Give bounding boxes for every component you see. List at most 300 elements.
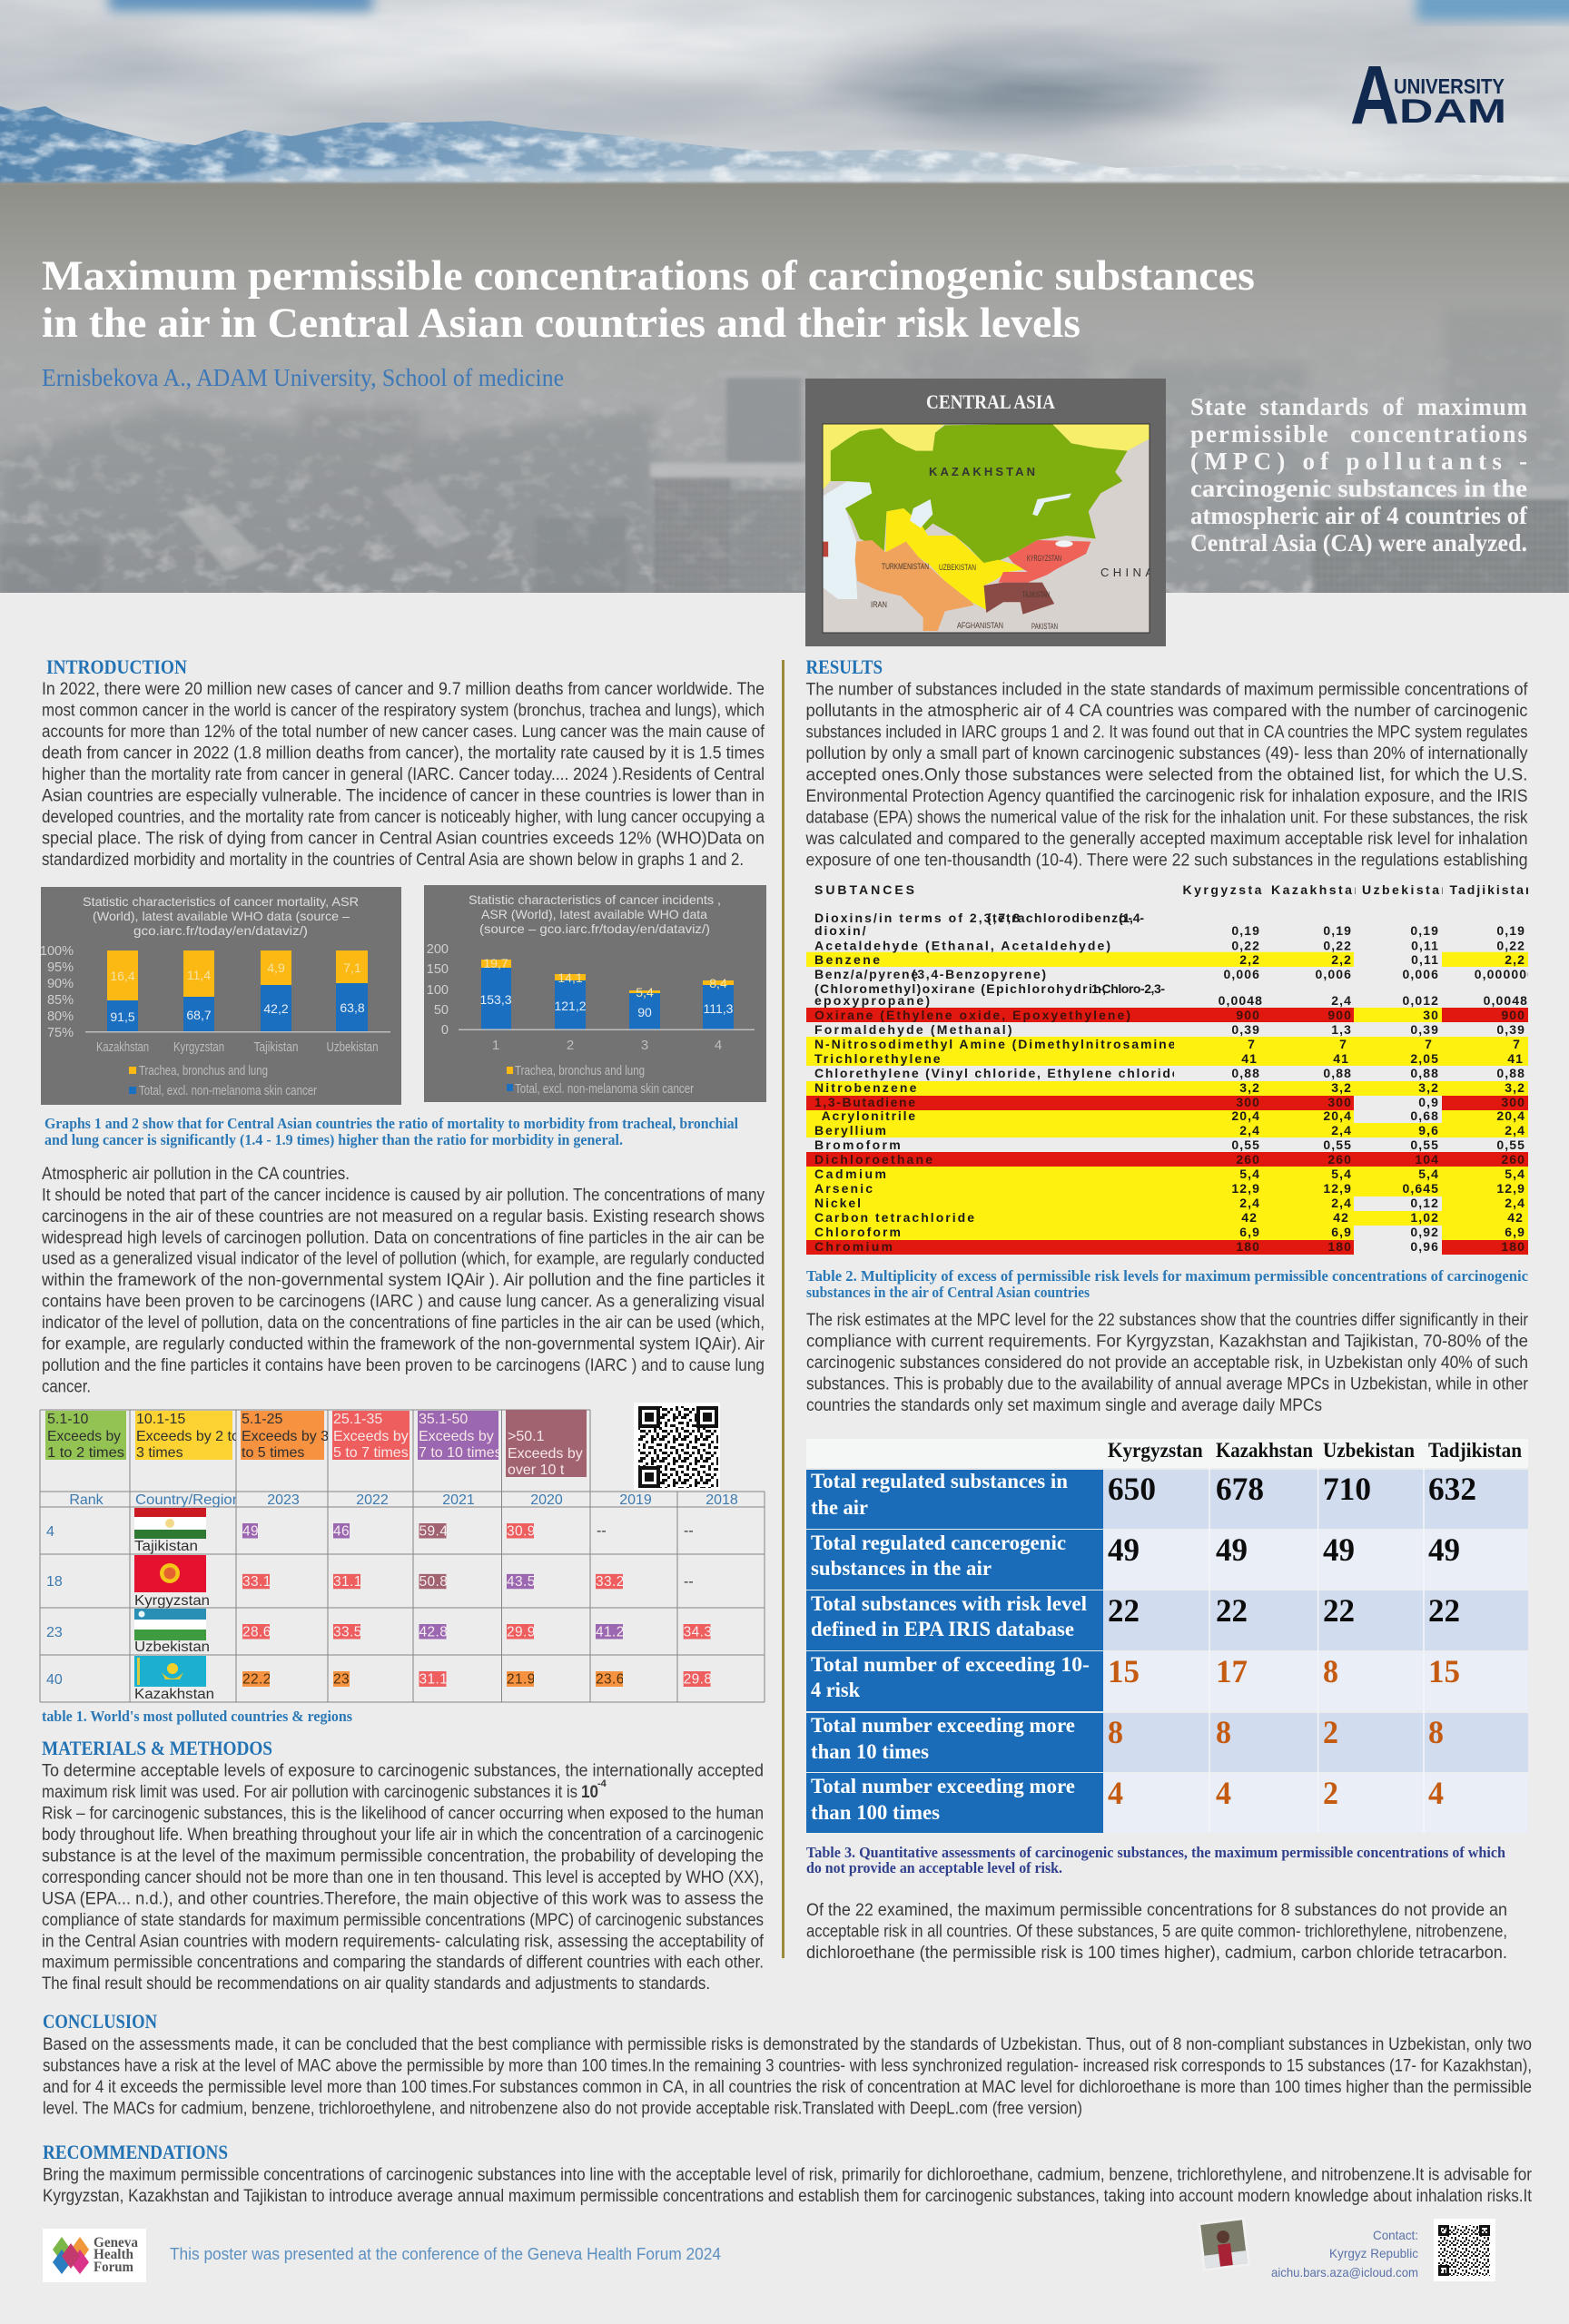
bar chart: cancer mortality: 4,9 <box>267 960 285 975</box>
bar chart: cancer mortality: (World), latest available WHO data (source – <box>93 909 350 923</box>
row: Kazakhstan: 23 <box>333 1672 350 1687</box>
bar chart: cancer mortality: 100% <box>40 944 74 959</box>
substance values: 7 <box>1513 1037 1521 1051</box>
map of Central Asia <box>823 424 1153 633</box>
row: Kyrgyzstan: Kyrgyzstan <box>134 1593 210 1609</box>
substance names: Chromium <box>814 1239 893 1254</box>
text block: materials and methods: maximum risk limit was used. For air pollution with carcinogenic substances it is <box>42 1783 577 1802</box>
column headers <box>814 882 1533 897</box>
substance names: (3,4-Benzopyrene) <box>912 967 1046 981</box>
row: Uzbekistan: 41.2 <box>596 1625 625 1640</box>
legend: concentration colour scale: 5 to 7 times <box>333 1445 409 1461</box>
text block: atmospheric air pollution: carcinogens in the air of these countries are not measured on a regular basis. Existing research shows <box>42 1207 765 1226</box>
row: Kazakhstan: 31.1 <box>419 1672 448 1687</box>
heading: introduction: INTRODUCTION <box>46 655 187 678</box>
portrait photo <box>1198 2217 1250 2271</box>
row: regulated cancerogenic substances: 49 <box>1108 1531 1140 1568</box>
header row: Kyrgyzstan <box>1108 1439 1203 1462</box>
text block: atmospheric air pollution: within the framework of the non-governmental system IQAir ). Air pollution and the fine particles it <box>41 1271 765 1290</box>
substance values: 6,9 <box>1331 1225 1352 1239</box>
heading: conclusion: CONCLUSION <box>43 2010 157 2033</box>
bar chart: cancer incidents: Total, excl. non-melanoma skin cancer <box>515 1081 694 1097</box>
row: Tajikistan: -- <box>684 1523 694 1539</box>
substance values: 30 <box>1423 1008 1439 1022</box>
substance names: Arsenic <box>814 1181 873 1196</box>
column headers: SUBTANCES <box>814 882 914 897</box>
map labels: TURKMENISTAN <box>882 562 929 571</box>
table header: 2021 <box>442 1492 475 1508</box>
caption: table 2 <box>806 1267 1528 1301</box>
panel: Central Asia map: CENTRAL ASIA <box>926 390 1055 413</box>
row: Uzbekistan: 28.6 <box>242 1625 271 1640</box>
text block: results: pollutants in the atmospheric air of 4 CA countries was compared with the number of carcinogenic <box>806 702 1527 721</box>
text block: examined substances: Of the 22 examined, the maximum permissible concentrations for 8 substances do not provide an <box>806 1901 1507 1920</box>
substance values: 0,96 <box>1410 1239 1439 1254</box>
substance values: 2,4 <box>1505 1196 1525 1210</box>
substance values: 300 <box>1236 1095 1260 1109</box>
bar chart: cancer mortality: Kyrgyzstan <box>173 1039 224 1055</box>
bar chart: cancer mortality: 95% <box>47 960 74 975</box>
caption: table 3: do not provide an acceptable level of risk. <box>806 1859 1062 1876</box>
substance values: 7 <box>1339 1037 1347 1051</box>
caption: table 3 <box>806 1844 1506 1876</box>
substance values: 2,2 <box>1505 952 1525 967</box>
text block: state standards summary: permissible concentrations <box>1190 420 1527 448</box>
row: Tajikistan: 59.4 <box>419 1523 448 1540</box>
row: total regulated substances: 678 <box>1216 1471 1264 1507</box>
text block: atmospheric air pollution: used as a generalized visual indicator of the level of pollution (which, for example, are regularly conducted <box>42 1250 765 1269</box>
row: exceeding 10-4 risk <box>811 1653 1460 1701</box>
row: regulated cancerogenic substances: substances in the air <box>811 1557 992 1580</box>
text block: atmospheric air pollution: pollution and the fine particles it contains have been proven to be carcinogens (IARC ) and to cause lung <box>42 1356 765 1375</box>
column headers: Kyrgyzstan <box>1182 882 1271 897</box>
row: Kyrgyzstan: 43.5 <box>507 1574 536 1590</box>
text block: materials and methods: substance is at the level of the maximum permissible concentration, the probability of developing the <box>42 1847 764 1866</box>
bar chart: cancer incidents: 19,7 <box>483 956 508 970</box>
row: Kyrgyzstan: -- <box>684 1574 694 1590</box>
substance values: 0,88 <box>1496 1066 1525 1080</box>
substance values: 3,2 <box>1505 1080 1525 1095</box>
text block: results: pollution by only a small part of known carcinogenic substances (49)- less than 20% of internationally <box>806 744 1528 763</box>
substance values: 0,88 <box>1410 1066 1439 1080</box>
substance values: 2,4 <box>1239 1196 1260 1210</box>
header photo: mountains above smog over city <box>0 0 1569 618</box>
text block: materials and methods: corresponding cancer should not be more than one in ten thousand. This level is accepted by WHO (XX), <box>42 1868 764 1887</box>
substance values: 0,006 <box>1315 967 1352 981</box>
map labels <box>871 465 1153 631</box>
legend: concentration colour scale: 5.1-10 <box>47 1412 88 1427</box>
text block: atmospheric air pollution <box>41 1165 765 1396</box>
row: exceeding 10-4 risk: Total number of exceeding 10- <box>811 1653 1090 1676</box>
column headers: Uzbekistan <box>1362 882 1449 897</box>
substance values: 20,4 <box>1496 1108 1525 1123</box>
text block: materials and methods: The final result should be recommendations on air quality standards and adjustments to standards. <box>42 1974 710 1994</box>
bar chart: cancer incidents: 121,2 <box>554 999 587 1013</box>
legend: concentration colour scale: 25.1-35 <box>333 1412 382 1427</box>
text block: introduction: standardized morbidity and mortality in the countries of Central Asia are shown below in graphs 1 and 2. <box>42 851 744 870</box>
row: total regulated substances: 710 <box>1323 1471 1371 1507</box>
substance values: 0,22 <box>1496 939 1525 953</box>
substance values: 260 <box>1327 1152 1352 1167</box>
text block: conclusion: level. The MACs for cadmium, benzene, trichloroethylene, and nitrobenzene also do not provide acceptable risk.Translated with DeepL.com (free version) <box>43 2099 1082 2119</box>
substance values: 300 <box>1501 1095 1525 1109</box>
row: exceeding more than 100 times: 2 <box>1323 1775 1338 1811</box>
text block: atmospheric air pollution: for example, are regularly conducted within the framework of the non-governmental system IQAir). Air <box>42 1334 765 1354</box>
footer note: This poster was presented at the conference of the Geneva Health Forum 2024 <box>170 2245 721 2263</box>
substance values: 5,4 <box>1418 1167 1439 1181</box>
substance values: 3,2 <box>1418 1080 1439 1095</box>
row: exceeding more than 10 times: Total number exceeding more <box>811 1714 1075 1737</box>
bar chart: cancer mortality: 42,2 <box>263 1001 289 1016</box>
text block: risk estimates: countries the standards only set maximum single and average daily MPCs <box>806 1396 1322 1415</box>
bar chart: cancer mortality: gco.iarc.fr/today/en/dataviz/) <box>133 923 308 938</box>
substance values: 180 <box>1501 1239 1525 1254</box>
substance names: Carbon tetrachloride <box>814 1210 974 1225</box>
bar chart: cancer incidents: 200 <box>427 942 449 957</box>
substance values: 0,39 <box>1410 1022 1439 1037</box>
substance names: dioxin/ <box>814 923 866 938</box>
substance names: Nitrobenzene <box>814 1080 917 1095</box>
row: substances with defined risk: 22 <box>1216 1592 1248 1629</box>
bar chart: cancer incidents: 90 <box>637 1005 652 1019</box>
substance values: 2,05 <box>1410 1051 1439 1066</box>
text block: introduction: death from cancer in 2022 (1.8 million deaths from cancer), the mortality rate caused by it is 1.5 times <box>42 744 765 763</box>
legend: concentration colour scale: 3 times <box>136 1445 183 1461</box>
substance names: epoxypropane) <box>814 993 930 1008</box>
bar chart: cancer incidents: 150 <box>427 962 449 977</box>
substance values: 9,6 <box>1418 1123 1439 1137</box>
substance names: Nickel <box>814 1196 861 1210</box>
bar chart: cancer incidents: 8,4 <box>709 976 727 990</box>
substance values: 260 <box>1236 1152 1260 1167</box>
text block: introduction: higher than the mortality rate from cancer in general (IARC. Cancer today.... 2024 ).Residents of Central <box>42 765 765 784</box>
legend: concentration colour scale: 7 to 10 times <box>419 1445 502 1461</box>
text block: results: exposure of one ten-thousandth (10-4). There were 22 such substances in the regulations establishing <box>806 852 1527 871</box>
row: Uzbekistan: 23 <box>46 1625 63 1640</box>
bar chart: cancer incidents: 111,3 <box>704 1001 734 1016</box>
row: Kyrgyzstan: 31.1 <box>333 1574 362 1590</box>
row: total regulated substances: the air <box>811 1496 868 1519</box>
logo: Geneva Health Forum: Geneva <box>94 2235 138 2250</box>
column headers: Tadjikistan <box>1449 882 1533 897</box>
row: exceeding 10-4 risk: 15 <box>1428 1653 1460 1689</box>
contact details: Contact: <box>1373 2228 1418 2242</box>
table header <box>69 1492 738 1508</box>
substance values: 0,55 <box>1231 1137 1260 1152</box>
row: Kyrgyzstan: 33.2 <box>596 1574 625 1590</box>
row: Kyrgyzstan <box>46 1555 694 1609</box>
text block: materials and methods: 10 <box>581 1783 598 1802</box>
substance values: 0,19 <box>1496 923 1525 938</box>
legend: concentration colour scale: Exceeds by 3 <box>242 1429 329 1444</box>
row backgrounds <box>806 1439 1528 1833</box>
text block: introduction: most common cancer in the world is cancer of the respiratory system (bronchus, trachea and lungs), which <box>42 701 765 721</box>
substance names: Beryllium <box>814 1123 886 1137</box>
row: exceeding 10-4 risk: 17 <box>1216 1653 1248 1689</box>
text block: results <box>805 681 1528 871</box>
substance values: 0,11 <box>1411 952 1439 967</box>
substance values <box>1219 923 1535 1254</box>
row: regulated cancerogenic substances: Total regulated cancerogenic <box>811 1531 1066 1554</box>
row: exceeding more than 10 times: 8 <box>1428 1714 1444 1750</box>
substance values: 900 <box>1327 1008 1352 1022</box>
row: Kyrgyzstan: 18 <box>46 1574 63 1590</box>
substance values: 0,92 <box>1410 1225 1439 1239</box>
row: Kyrgyzstan: 33.1 <box>242 1574 271 1590</box>
divider between columns <box>782 660 784 1958</box>
row: total regulated substances <box>811 1470 1476 1519</box>
substance values: 6,9 <box>1239 1225 1260 1239</box>
legend: concentration colour scale: over 10 t <box>508 1462 565 1478</box>
text block: state standards summary <box>1190 393 1528 556</box>
row: total regulated substances: Total regulated substances in <box>811 1470 1068 1492</box>
bar chart: cancer mortality: 11,4 <box>187 968 211 982</box>
substance names: Cadmium <box>814 1167 886 1181</box>
substance values: 260 <box>1501 1152 1525 1167</box>
row: Tajikistan: 30.9 <box>507 1523 536 1540</box>
substance values: 0,000006 <box>1475 967 1535 981</box>
bar chart: cancer incidents: 153,3 <box>479 992 512 1007</box>
sky and clouds <box>0 0 1569 182</box>
substance values: 0,68 <box>1410 1108 1439 1123</box>
table header: Rank <box>69 1492 104 1508</box>
substance values: 0,55 <box>1323 1137 1352 1152</box>
logo: ADAM University: DAM <box>1399 93 1506 130</box>
substance names: Benz/a/pyrene <box>814 967 918 981</box>
map labels: UZBEKISTAN <box>939 563 976 572</box>
text block: materials and methods: body throughout life. When breathing throughout your life air in which the concentration of a carcinogenic <box>42 1826 764 1845</box>
row: substances with defined risk <box>811 1592 1460 1640</box>
legend: concentration colour scale: 5.1-25 <box>242 1412 282 1427</box>
text block: state standards summary: (MPC) of pollutants - <box>1190 448 1527 475</box>
bar chart: cancer incidents: 4 <box>715 1038 722 1053</box>
legend: concentration colour scale: Exceeds by <box>47 1429 121 1444</box>
heading: results: RESULTS <box>806 655 883 678</box>
map labels: PAKISTAN <box>1031 622 1058 631</box>
row: exceeding 10-4 risk: 8 <box>1323 1653 1338 1689</box>
legend: concentration colour scale: >50.1 <box>508 1429 545 1444</box>
substance values: 12,9 <box>1496 1181 1525 1196</box>
bar chart: cancer mortality: Kazakhstan <box>96 1039 149 1055</box>
substance values: 0,11 <box>1411 939 1439 953</box>
text block: results: accepted ones.Only those substances were selected from the obtained list, for which the U.S. <box>806 766 1527 785</box>
map labels: CHINA <box>1100 566 1153 579</box>
header row: Tadjikistan <box>1428 1439 1522 1462</box>
bar chart: cancer mortality: 68,7 <box>186 1008 212 1022</box>
substance values: 0,22 <box>1323 939 1352 953</box>
table header: 2022 <box>356 1492 389 1508</box>
substance names: Dioxins/in terms of 2,3,7,8 <box>814 911 1020 925</box>
bar chart: cancer mortality: Tajikistan <box>254 1039 298 1055</box>
text block: risk estimates: compliance with current requirements. For Kyrgyzstan, Kazakhstan and Tajikistan, 70-80% of the <box>806 1333 1528 1351</box>
mountain range <box>0 106 1569 183</box>
substance values: 0,645 <box>1402 1181 1439 1196</box>
substance values: 180 <box>1236 1239 1260 1254</box>
row: substances with defined risk: 22 <box>1108 1592 1140 1629</box>
bar chart: cancer incidents: 1 <box>492 1038 499 1053</box>
text block: atmospheric air pollution: cancer. <box>42 1377 91 1396</box>
row: Kazakhstan: 22.2 <box>242 1672 271 1687</box>
text block: materials and methods: maximum permissible concentrations and comparing the standards of different countries with each other. <box>42 1954 764 1973</box>
logo: ADAM University: UNIVERSITY <box>1394 74 1505 98</box>
text block: introduction <box>42 680 765 870</box>
table: risk multiplicity by substance <box>806 882 1535 1255</box>
text block: atmospheric air pollution: contains have been proven to be carcinogens (IARC ) and cause lung cancer. As a generalizing visual <box>42 1293 765 1312</box>
text block: introduction: developed countries, and the mortality rate from cancer is noticeably higher, with lung cancer occupying a <box>42 808 765 827</box>
substance names: N-Nitrosodimethyl Amine (Dimethylnitrosamine) <box>814 1037 1181 1051</box>
substance values: 0,22 <box>1231 939 1260 953</box>
text block: materials and methods: compliance of state standards for maximum permissible concentrations (MPC) of carcinogenic substances <box>42 1911 764 1930</box>
title: in the air in Central Asian countries and their risk levels <box>42 300 1081 347</box>
caption: table 1: table 1. World's most polluted countries & regions <box>42 1708 352 1725</box>
legend: concentration colour scale: Exceeds by <box>333 1429 409 1444</box>
bar chart: cancer mortality: Trachea, bronchus and lung <box>139 1063 268 1078</box>
caption: graphs 1 and 2 <box>44 1115 738 1148</box>
row: Uzbekistan <box>46 1609 712 1655</box>
row: exceeding more than 100 times: 4 <box>1108 1775 1123 1811</box>
bar chart: cancer incidents: 2 <box>567 1038 574 1053</box>
column headers: Kazakhstan <box>1271 882 1362 897</box>
bar chart: cancer incidents: Trachea, bronchus and lung <box>515 1063 645 1078</box>
substance names: Formaldehyde (Methanal) <box>814 1022 1011 1037</box>
caption: graphs 1 and 2: and lung cancer is significantly (1.4 - 1.9 times) higher than the ratio for morbidity in general. <box>44 1131 623 1148</box>
row: Kazakhstan: 29.8 <box>684 1672 712 1687</box>
substance values: 0,0048 <box>1484 993 1528 1008</box>
bar chart: cancer incidents: (source – gco.iarc.fr/today/en/dataviz/) <box>479 921 710 936</box>
row: Tajikistan: -- <box>597 1523 607 1539</box>
bar chart: cancer incidents: ASR (World), latest available WHO data <box>481 907 707 921</box>
map labels: KAZAKHSTAN <box>929 465 1035 478</box>
row: Kazakhstan: 21.9 <box>507 1672 536 1687</box>
legend: concentration colour scale: to 5 times <box>242 1445 304 1461</box>
substance values: 7 <box>1248 1037 1256 1051</box>
row: total regulated substances: 650 <box>1108 1471 1156 1507</box>
text block: materials and methods: To determine acceptable levels of exposure to carcinogenic substances, the internationally accepted <box>42 1762 764 1781</box>
contact details <box>1271 2228 1418 2280</box>
header row <box>1108 1439 1522 1462</box>
legend: concentration colour scale: Exceeds by <box>508 1446 583 1462</box>
substance values: 0,55 <box>1410 1137 1439 1152</box>
row: exceeding more than 100 times: Total number exceeding more <box>811 1775 1075 1797</box>
substance names <box>814 911 1185 1254</box>
table: quantitative assessments <box>806 1439 1528 1833</box>
text block: materials and methods: in the Central Asian countries with modern requirements- calculating risk, assessing the acceptability of <box>42 1932 765 1951</box>
table: most polluted countries <box>40 1403 765 1702</box>
row: exceeding 10-4 risk: 4 risk <box>811 1679 860 1701</box>
bar chart: cancer incidents: 0 <box>441 1023 449 1038</box>
bar chart: cancer incidents: 100 <box>427 983 449 998</box>
row: exceeding more than 10 times: 8 <box>1216 1714 1231 1750</box>
text block: introduction: Asian countries are especially vulnerable. The incidence of cancer in these countries is lower than in <box>42 786 765 806</box>
substance values: 42 <box>1333 1210 1349 1225</box>
substance values: 104 <box>1415 1152 1439 1167</box>
substance values: 6,9 <box>1505 1225 1525 1239</box>
row: Uzbekistan: 33.5 <box>333 1625 362 1640</box>
bar chart: cancer mortality: Statistic characteristics of cancer mortality, ASR <box>83 894 359 909</box>
title <box>42 252 1255 347</box>
row: substances with defined risk: Total substances with risk level <box>811 1592 1087 1615</box>
author line: Ernisbekova A., ADAM University, School of medicine <box>42 364 564 391</box>
row: Tajikistan: 4 <box>46 1524 54 1540</box>
legend: concentration colour scale: 10.1-15 <box>136 1412 185 1427</box>
bar chart: cancer incidents <box>424 885 766 1102</box>
smog layer <box>0 182 1569 618</box>
row: regulated cancerogenic substances: 49 <box>1216 1531 1248 1568</box>
table header: 2023 <box>267 1492 300 1508</box>
substance values: 300 <box>1327 1095 1352 1109</box>
text block: atmospheric air pollution: indicator of the level of pollution, data on the concentrations of fine particles in the air can be used (which, <box>42 1314 765 1333</box>
text block: materials and methods <box>42 1762 765 1994</box>
text block: atmospheric air pollution: It should be noted that part of the cancer incidence is caused by air pollution. The concentrations of many <box>42 1186 765 1205</box>
row: Tajikistan: Tajikistan <box>134 1539 198 1554</box>
bar chart: cancer incidents: 14,1 <box>558 970 583 985</box>
substance values: 2,4 <box>1331 1196 1352 1210</box>
row: exceeding more than 10 times: 8 <box>1108 1714 1123 1750</box>
substance names: Acetaldehyde (Ethanal, Acetaldehyde) <box>814 939 1110 953</box>
row: Uzbekistan: 42.8 <box>419 1625 448 1640</box>
row: exceeding more than 100 times: 4 <box>1216 1775 1231 1811</box>
highlight bands <box>806 952 1528 1255</box>
caption: table 2: substances in the air of Central Asian countries <box>806 1284 1090 1301</box>
text block: atmospheric air pollution: Atmospheric air pollution in the CA countries. <box>42 1165 350 1184</box>
substance values: 0,006 <box>1402 967 1439 981</box>
substance names: Trichlorethylene <box>814 1051 941 1066</box>
text block: state standards summary: atmospheric air of 4 countries of <box>1190 502 1528 529</box>
table grid <box>40 1410 765 1702</box>
logo: Geneva Health Forum: Forum <box>94 2260 134 2275</box>
contact details: Kyrgyz Republic <box>1329 2246 1418 2260</box>
row: substances with defined risk: 22 <box>1428 1592 1460 1629</box>
text block: atmospheric air pollution: widespread high levels of carcinogen pollution. Data on concentrations of fine particles in the air can be <box>41 1228 765 1247</box>
substance values: 0,12 <box>1410 1196 1439 1210</box>
heading: materials and methods: MATERIALS & METHODOS <box>42 1737 272 1759</box>
substance values: 20,4 <box>1323 1108 1352 1123</box>
substance values: 0,19 <box>1231 923 1260 938</box>
legend: concentration colour scale: Exceeds by 2 to <box>136 1429 240 1444</box>
row: exceeding more than 100 times: than 100 times <box>811 1801 940 1824</box>
substance values: 12,9 <box>1231 1181 1260 1196</box>
substance names: Bromoform <box>814 1137 901 1152</box>
substance values: 5,4 <box>1331 1167 1352 1181</box>
substance names: (1,4- <box>1119 911 1144 925</box>
row: regulated cancerogenic substances: 49 <box>1428 1531 1460 1568</box>
logo: Geneva Health Forum <box>43 2229 146 2282</box>
substance names: Oxirane (Ethylene oxide, Epoxyethylene) <box>814 1008 1130 1022</box>
row: Tajikistan: 46 <box>333 1523 350 1540</box>
legend: concentration colour scale <box>45 1410 587 1478</box>
substance values: 41 <box>1507 1051 1524 1066</box>
substance values: 0,55 <box>1496 1137 1525 1152</box>
substance values: 0,0048 <box>1219 993 1263 1008</box>
substance values: 12,9 <box>1323 1181 1352 1196</box>
substance names: (tetrachlorodibenzo- <box>987 911 1132 925</box>
bar chart: cancer mortality: 75% <box>47 1026 74 1040</box>
substance values: 2,4 <box>1505 1123 1525 1137</box>
header row: Uzbekistan <box>1323 1439 1415 1462</box>
logo: ADAM University: A <box>1350 49 1399 142</box>
substance names: Chlorethylene (Vinyl chloride, Ethylene chloride) <box>814 1066 1185 1080</box>
text block: state standards summary: Central Asia (CA) were analyzed. <box>1190 529 1527 556</box>
text block: materials and methods: USA (EPA... n.d.), and other countries.Therefore, the main objective of this work was to assess the <box>42 1889 764 1908</box>
substance values: 0,9 <box>1418 1095 1439 1109</box>
row: Kazakhstan: Kazakhstan <box>134 1687 214 1702</box>
substance values: 2,4 <box>1331 993 1352 1008</box>
substance values: 42 <box>1241 1210 1258 1225</box>
substance values: 0,012 <box>1402 993 1439 1008</box>
text block: results: Environmental Protection Agency quantified the carcinogenic risk for inhalation exposure, and the IRIS <box>806 787 1527 806</box>
row: substances with defined risk: 22 <box>1323 1592 1355 1629</box>
contact details: aichu.bars.aza@icloud.com <box>1271 2265 1418 2280</box>
